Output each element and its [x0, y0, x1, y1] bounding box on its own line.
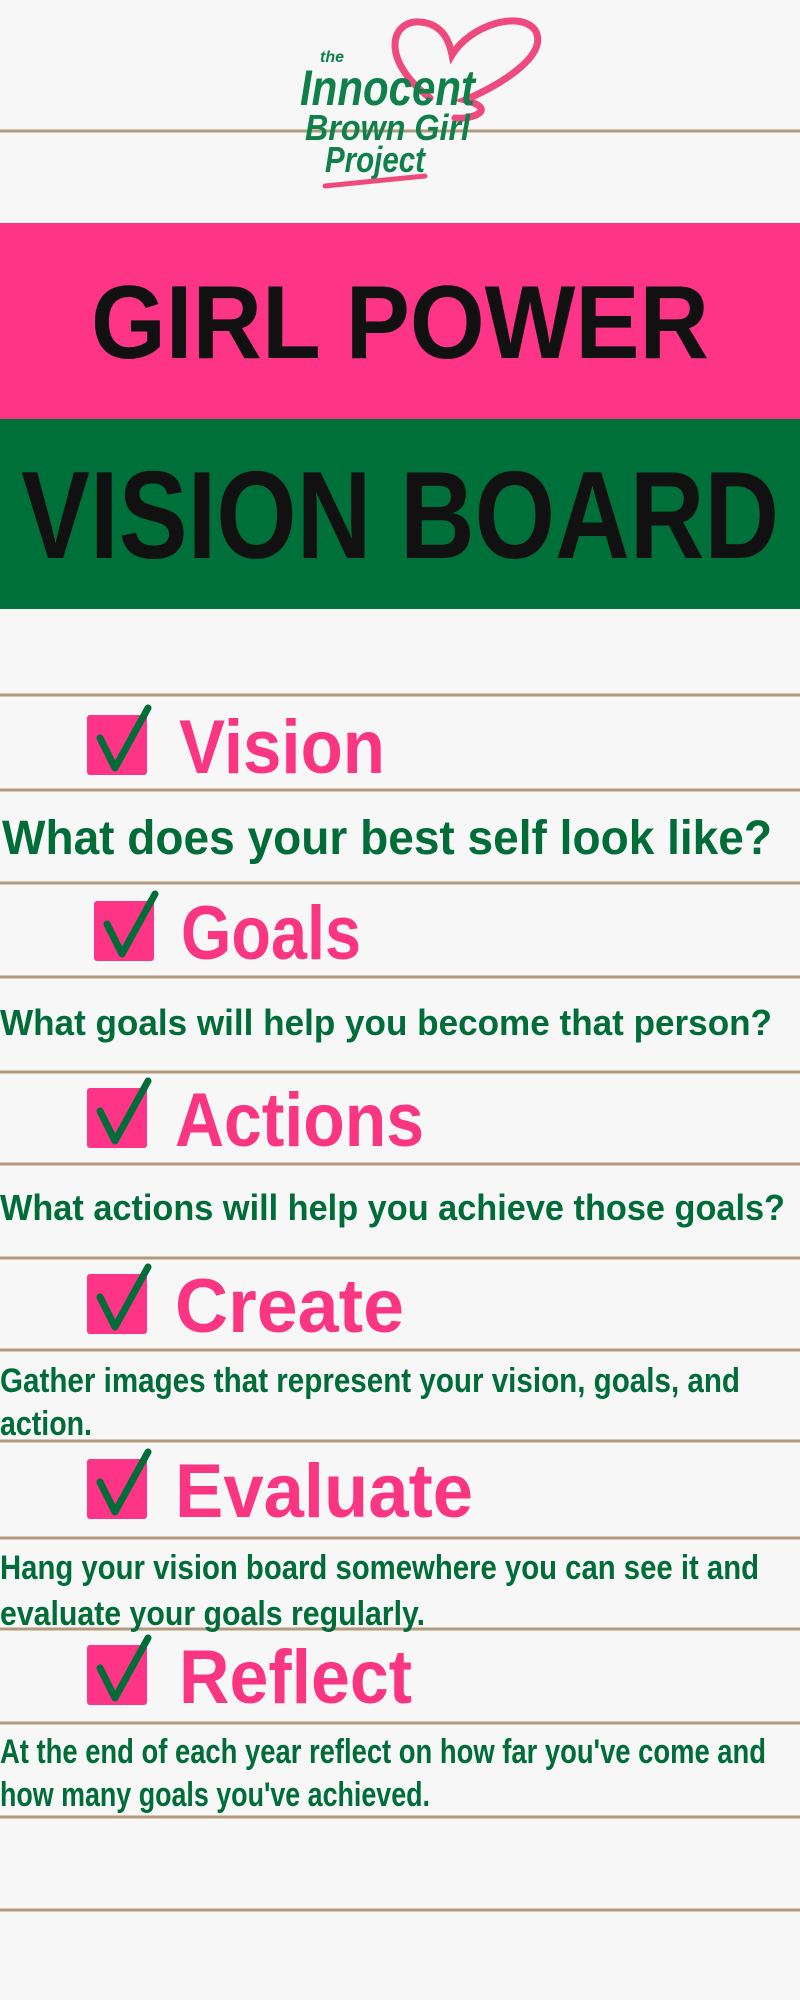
item: Vision: Vision: [179, 705, 385, 790]
item: Goals: Goals: [181, 891, 361, 976]
icon: checkbox: [87, 1452, 148, 1519]
item: Reflect: how many goals you've achieved.: [0, 1776, 430, 1814]
icon: checkbox: [87, 708, 148, 775]
item: Reflect: Reflect: [179, 1635, 412, 1720]
item: Reflect: [0, 1635, 766, 1814]
title band: GIRL POWER: GIRL POWER: [91, 265, 709, 381]
icon: checkbox: [87, 1267, 148, 1334]
item: Vision: [2, 705, 772, 865]
logo: the: [320, 49, 344, 66]
icon: checkbox: [87, 1081, 148, 1148]
icon: heart: [395, 21, 538, 118]
item: Evaluate: Evaluate: [175, 1449, 473, 1534]
icon: checkbox: [94, 894, 155, 961]
item: Evaluate: [0, 1449, 759, 1633]
logo: Project: [325, 139, 427, 180]
item: Create: Create: [175, 1264, 404, 1349]
item: Create: action.: [0, 1405, 92, 1443]
logo: Brown Girl: [305, 107, 471, 148]
title band: GIRL POWER: [0, 223, 800, 419]
item: Create: [0, 1264, 740, 1443]
icon: checkbox: [87, 1638, 148, 1705]
item: Actions: What actions will help you achieve those goals?: [0, 1187, 785, 1228]
item: Goals: [0, 891, 772, 1043]
item: Vision: What does your best self look like?: [2, 812, 772, 865]
item: Actions: Actions: [175, 1078, 424, 1163]
item: Evaluate: evaluate your goals regularly.: [0, 1595, 425, 1633]
item: Goals: What goals will help you become that person?: [0, 1002, 772, 1043]
item: Actions: [0, 1078, 785, 1228]
logo: Innocent: [300, 60, 477, 116]
logo: [300, 21, 538, 186]
